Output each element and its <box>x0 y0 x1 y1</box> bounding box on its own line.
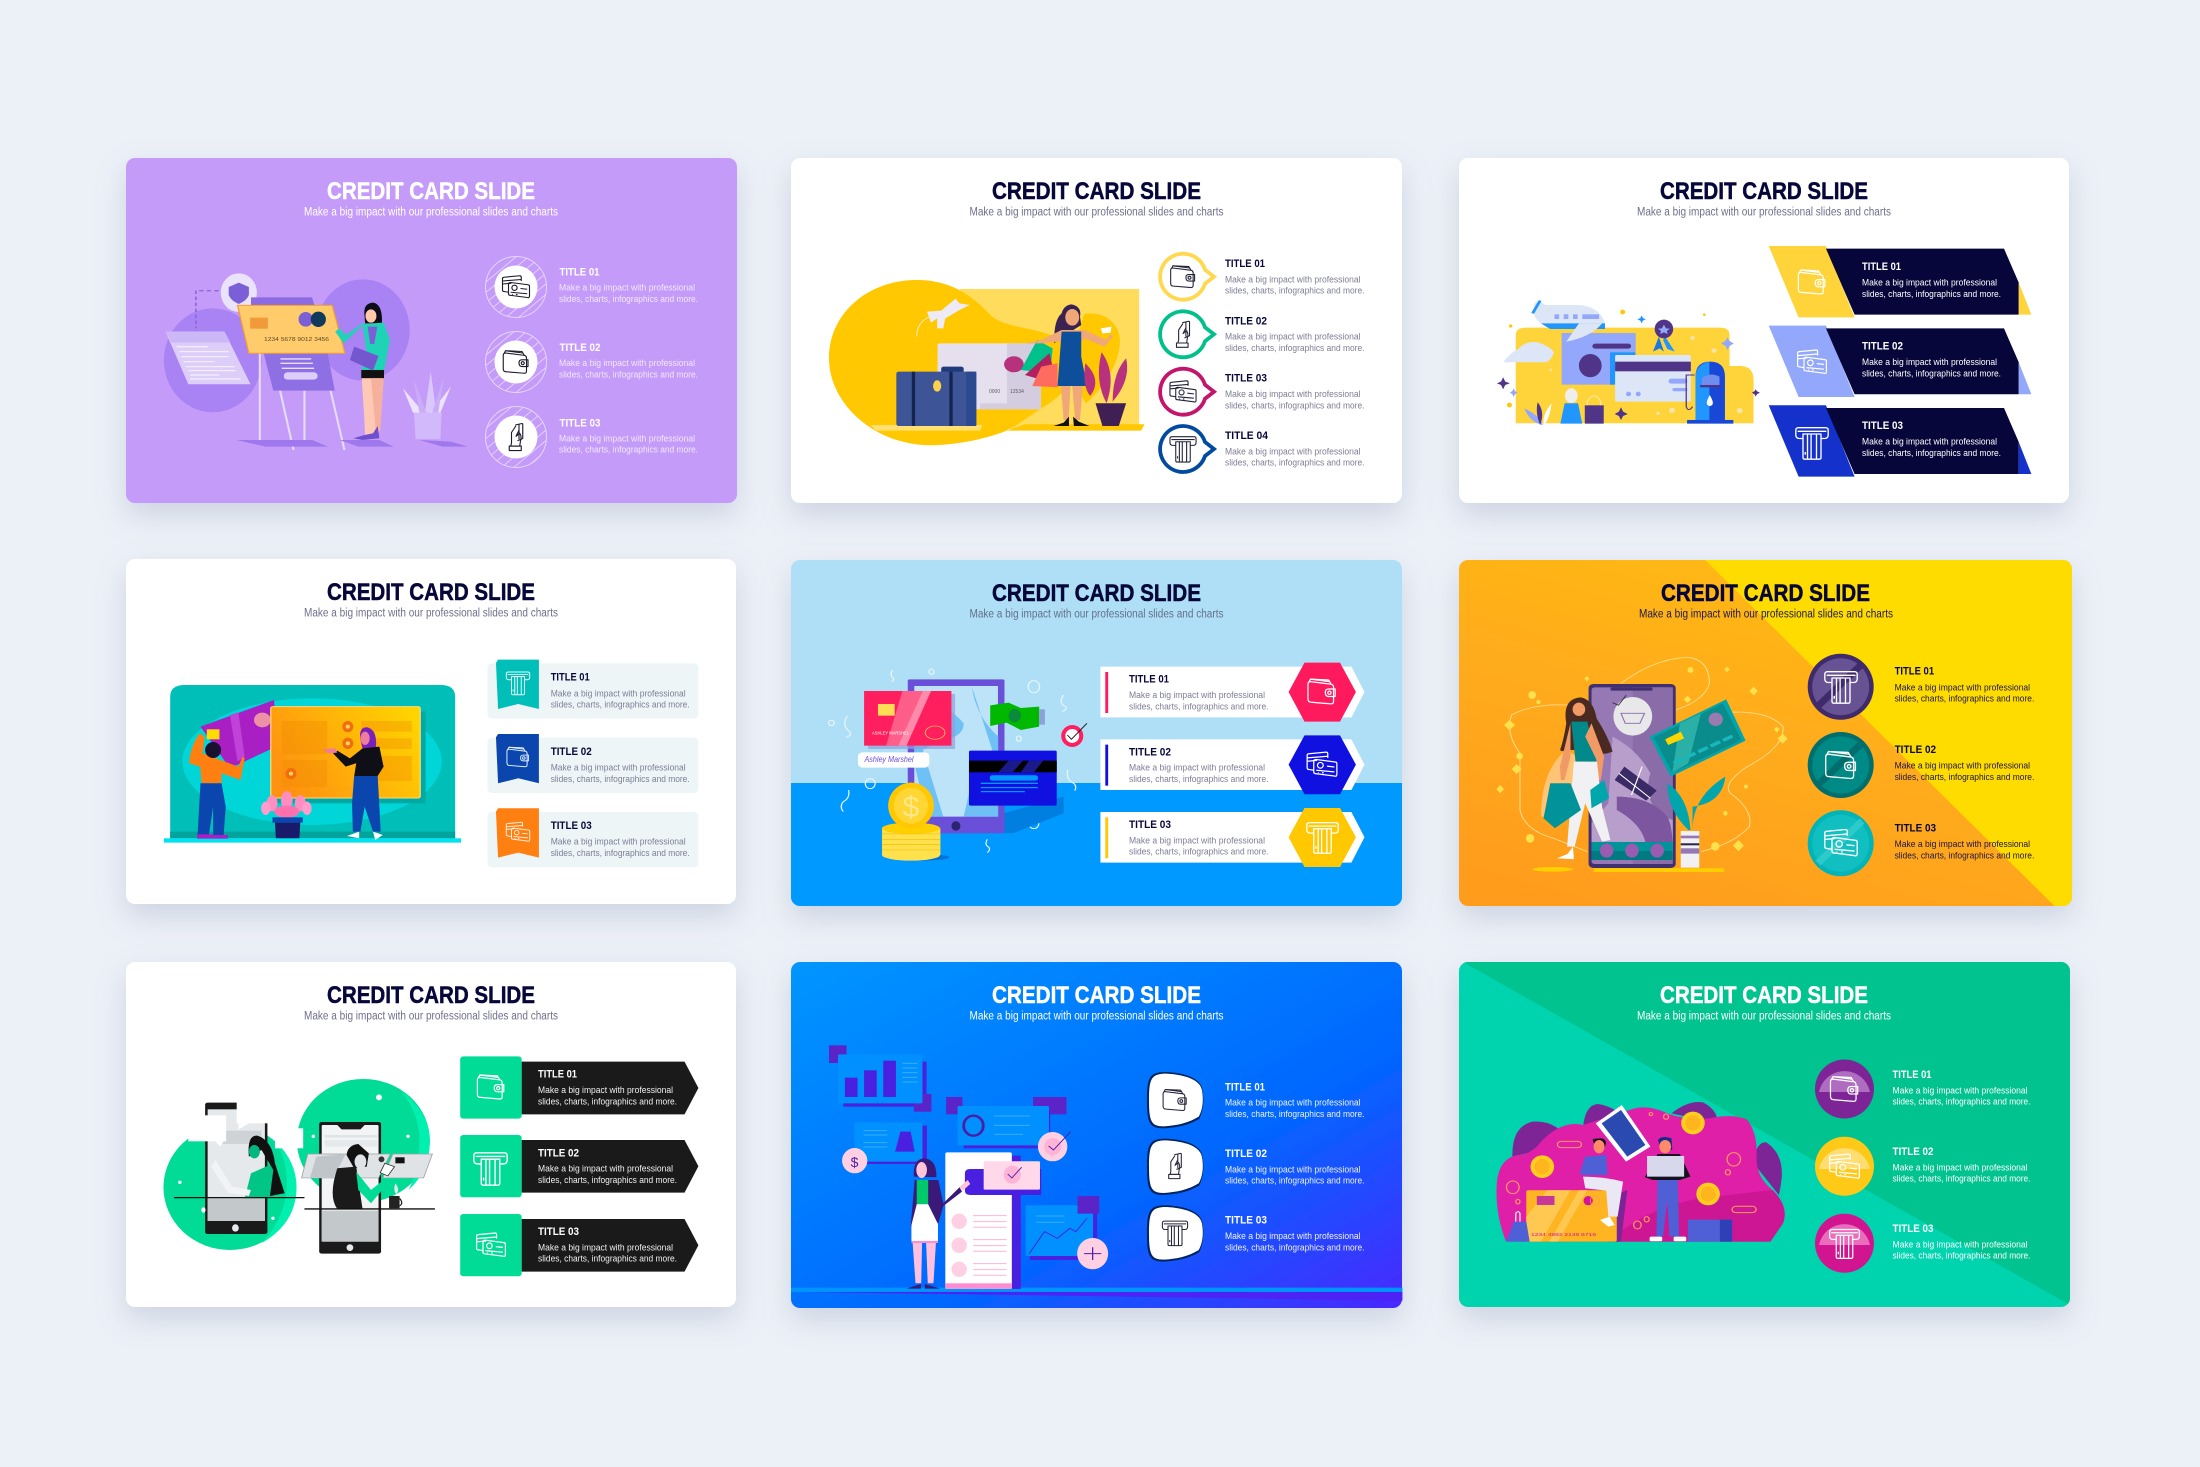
row 3 <box>460 1214 698 1276</box>
item 2: TITLE 02 <box>1892 1146 1934 1158</box>
row 2: Make a big impact with professional <box>538 1164 673 1174</box>
row 1 <box>1100 663 1364 722</box>
item 1: slides, charts, infographics and more. <box>1892 1097 2030 1107</box>
subtitle: Make a big impact with our professional slides and charts <box>1639 608 1893 620</box>
item 3: TITLE 03 <box>1225 1215 1267 1227</box>
item 3 <box>486 406 698 468</box>
row 3: Make a big impact with professional <box>1129 835 1265 845</box>
panel: slide 9 green <box>1459 962 2070 1307</box>
row 1 <box>1769 246 2031 317</box>
item 1: TITLE 01 <box>560 267 600 279</box>
subtitle: Make a big impact with our professional slides and charts <box>970 608 1224 620</box>
row 2: slides, charts, infographics and more. <box>1862 368 2001 378</box>
item 1 <box>1815 1060 2030 1118</box>
row 1: slides, charts, infographics and more. <box>1129 701 1268 711</box>
item 3: Make a big impact with professional <box>1895 839 2030 849</box>
row 1: Make a big impact with professional <box>538 1085 673 1095</box>
row 1: TITLE 01 <box>1862 261 1901 273</box>
item 3: TITLE 03 <box>1895 822 1936 834</box>
item 2 <box>488 734 698 793</box>
item 1: slides, charts, infographics and more. <box>1225 1109 1364 1119</box>
panel: slide 5 blue with hexagons <box>791 560 1402 906</box>
item 2: TITLE 02 <box>1895 744 1936 756</box>
item 3: slides, charts, infographics and more. <box>1225 1242 1364 1252</box>
item 3 <box>1160 369 1364 415</box>
row 2 <box>1100 735 1364 794</box>
row 3: TITLE 03 <box>1129 819 1171 831</box>
item 2: TITLE 02 <box>551 746 592 758</box>
row 2 <box>460 1135 698 1197</box>
item 1: Make a big impact with professional <box>1892 1085 2028 1095</box>
item 3: Make a big impact with professional <box>1225 1231 1360 1241</box>
item 1: slides, charts, infographics and more. <box>1225 286 1364 296</box>
heading: CREDIT CARD SLIDE <box>1660 982 1868 1009</box>
illustration: phone consultants <box>163 1079 435 1254</box>
item 4 <box>1160 426 1364 472</box>
item 2 <box>1160 311 1364 357</box>
panel: slide 8 blue gradient <box>791 962 1402 1308</box>
panel: slide 1 purple <box>126 158 737 503</box>
dollar sign on coin: $ <box>903 791 920 824</box>
subtitle: Make a big impact with our professional slides and charts <box>1637 1010 1891 1022</box>
item 3 <box>1147 1205 1364 1262</box>
item 1: TITLE 01 <box>1225 1081 1265 1093</box>
item 1 <box>486 256 698 318</box>
row 2: Make a big impact with professional <box>1129 763 1265 773</box>
item 3: Make a big impact with professional <box>559 433 695 443</box>
heading: CREDIT CARD SLIDE <box>992 982 1201 1009</box>
row 1: Make a big impact with professional <box>1129 690 1265 700</box>
panel: slide 6 orange and yellow <box>1459 560 2072 906</box>
yellow diagonal area <box>1705 560 2072 906</box>
item 2: Make a big impact with professional <box>559 358 695 368</box>
heading: CREDIT CARD SLIDE <box>1661 580 1870 607</box>
item 4: slides, charts, infographics and more. <box>1225 458 1364 468</box>
item 2: Make a big impact with professional <box>551 763 686 773</box>
item 1 <box>1808 654 2034 720</box>
heading: CREDIT CARD SLIDE <box>1660 178 1868 205</box>
item 2 <box>1815 1137 2030 1196</box>
item 2: Make a big impact with professional <box>1892 1162 2028 1172</box>
row 1: TITLE 01 <box>538 1069 577 1081</box>
item 3: Make a big impact with professional <box>551 837 686 847</box>
item 2: TITLE 02 <box>1225 315 1267 327</box>
row 3: Make a big impact with professional <box>1862 437 1997 447</box>
item 3: TITLE 03 <box>551 820 592 832</box>
panel: slide 2 white with yellow illustration <box>791 158 1402 503</box>
subtitle: Make a big impact with our professional slides and charts <box>970 206 1224 218</box>
item 1 <box>488 660 698 719</box>
item 1: TITLE 01 <box>1225 258 1265 270</box>
item 2: slides, charts, infographics and more. <box>1225 343 1364 353</box>
item 2: TITLE 02 <box>560 342 600 354</box>
item 1: Make a big impact with professional <box>1895 682 2030 692</box>
name on card: ASHLEY MARSHEL <box>872 731 909 736</box>
item 3 <box>488 808 698 867</box>
item 4: Make a big impact with professional <box>1225 446 1360 456</box>
lower blue floor <box>791 783 1402 906</box>
item 3 <box>1808 810 2034 876</box>
item 2: Make a big impact with professional <box>1225 1164 1360 1174</box>
signature tag text: Ashley Marshel <box>864 755 914 764</box>
row 2: Make a big impact with professional <box>1862 357 1997 367</box>
panel: slide 3 white with parallelogram rows <box>1459 158 2069 503</box>
item 2: slides, charts, infographics and more. <box>551 774 690 784</box>
panel: slide 4 white with ribbons <box>126 559 736 904</box>
item 1: Make a big impact with professional <box>551 688 686 698</box>
subtitle: Make a big impact with our professional slides and charts <box>304 1010 558 1022</box>
row 3: slides, charts, infographics and more. <box>1862 448 2001 458</box>
item 1: TITLE 01 <box>551 672 590 684</box>
illustration: two people with giant card <box>164 685 461 843</box>
heading: CREDIT CARD SLIDE <box>327 178 535 205</box>
item 1: Make a big impact with professional <box>1225 274 1360 284</box>
row 2: TITLE 02 <box>1862 340 1903 352</box>
darker diagonal area <box>1463 962 2070 1305</box>
item 1: slides, charts, infographics and more. <box>1895 694 2034 704</box>
illustration: woman with dashboard panels <box>791 1045 1402 1301</box>
item 4: TITLE 04 <box>1225 430 1269 442</box>
illustration: woman presenting card on easel <box>164 273 468 450</box>
item 1: slides, charts, infographics and more. <box>559 294 698 304</box>
item 3: TITLE 03 <box>560 417 600 429</box>
item 2 <box>1147 1139 1364 1195</box>
item 3: slides, charts, infographics and more. <box>559 445 698 455</box>
heading: CREDIT CARD SLIDE <box>327 579 535 606</box>
subtitle: Make a big impact with our professional slides and charts <box>1637 206 1891 218</box>
row 3: TITLE 03 <box>538 1226 579 1238</box>
item 3: TITLE 03 <box>1225 373 1267 385</box>
item 1: TITLE 01 <box>1895 666 1934 678</box>
row 3: slides, charts, infographics and more. <box>1129 847 1268 857</box>
item 2: Make a big impact with professional <box>1895 761 2030 771</box>
item 1: TITLE 01 <box>1892 1069 1932 1081</box>
illustration: shopper with phone <box>1496 657 1788 872</box>
row 3 <box>1769 405 2031 477</box>
item 1: Make a big impact with professional <box>1225 1098 1360 1108</box>
card numbers: 0000 <box>989 389 1000 395</box>
item 1: slides, charts, infographics and more. <box>551 700 690 710</box>
illustration: airplane, cards and ATM <box>1497 301 1760 425</box>
row 1: TITLE 01 <box>1129 674 1169 686</box>
card number: 1234 5678 9012 3456 <box>264 337 329 343</box>
card numbers <box>989 389 1024 395</box>
item 3: Make a big impact with professional <box>1225 389 1360 399</box>
row 2: TITLE 02 <box>1129 746 1171 758</box>
row 2: TITLE 02 <box>538 1147 579 1159</box>
heading: CREDIT CARD SLIDE <box>992 178 1201 205</box>
item 1: Make a big impact with professional <box>559 283 695 293</box>
item 3: TITLE 03 <box>1892 1223 1934 1235</box>
row 1: slides, charts, infographics and more. <box>538 1096 677 1106</box>
item 2: Make a big impact with professional <box>1225 332 1360 342</box>
illustration: shopper with suitcase <box>829 280 1144 445</box>
infographic: nine credit card slides <box>118 158 2080 1328</box>
illustration: couple with coins and card <box>1496 1102 1785 1242</box>
subtitle: Make a big impact with our professional slides and charts <box>970 1010 1224 1022</box>
row 3 <box>1100 808 1364 867</box>
row 2: slides, charts, infographics and more. <box>1129 774 1268 784</box>
heading: CREDIT CARD SLIDE <box>327 982 535 1009</box>
item 2: slides, charts, infographics and more. <box>559 369 698 379</box>
card numbers: 12534 <box>1010 389 1024 395</box>
row 3: TITLE 03 <box>1862 420 1903 432</box>
item 2 <box>1808 732 2034 798</box>
row 3: slides, charts, infographics and more. <box>538 1254 677 1264</box>
card digits: 1234 4982 2139 6719 <box>1531 1232 1597 1237</box>
item 1 <box>1147 1072 1364 1128</box>
subtitle: Make a big impact with our professional slides and charts <box>304 206 558 218</box>
item 3: slides, charts, infographics and more. <box>1892 1251 2030 1261</box>
row 2 <box>1769 326 2031 397</box>
item 3: Make a big impact with professional <box>1892 1239 2028 1249</box>
heading: CREDIT CARD SLIDE <box>992 580 1201 607</box>
dollar badge: $ <box>851 1154 859 1170</box>
item 3: slides, charts, infographics and more. <box>1225 400 1364 410</box>
item 1 <box>1160 254 1364 300</box>
item 2: slides, charts, infographics and more. <box>1895 772 2034 782</box>
item 2: slides, charts, infographics and more. <box>1892 1174 2030 1184</box>
row 1: slides, charts, infographics and more. <box>1862 289 2001 299</box>
row 1: Make a big impact with professional <box>1862 278 1997 288</box>
row 3: Make a big impact with professional <box>538 1242 673 1252</box>
panel: slide 7 white with green and black rows <box>126 962 736 1307</box>
item 3 <box>1815 1214 2030 1273</box>
row 1 <box>460 1056 698 1119</box>
item 2: slides, charts, infographics and more. <box>1225 1176 1364 1186</box>
row 2: slides, charts, infographics and more. <box>538 1175 677 1185</box>
item 2 <box>486 332 698 392</box>
item 3: slides, charts, infographics and more. <box>1895 850 2034 860</box>
illustration: tablet with cards and coins <box>829 669 1087 861</box>
subtitle: Make a big impact with our professional slides and charts <box>304 608 558 620</box>
item 3: slides, charts, infographics and more. <box>551 848 690 858</box>
item 2: TITLE 02 <box>1225 1148 1267 1160</box>
